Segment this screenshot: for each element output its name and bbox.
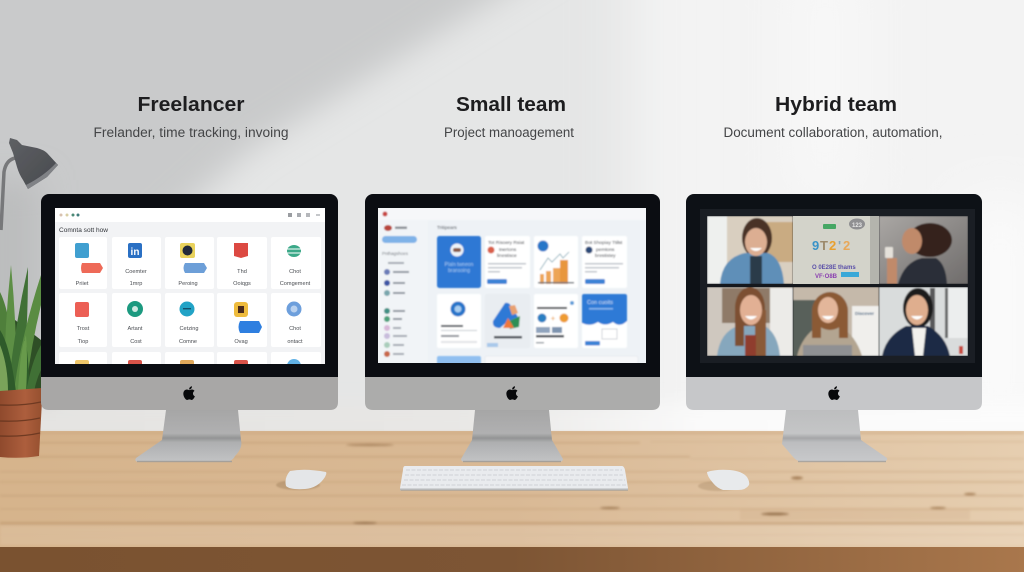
video tile: shared infographic slide: 9 [812,238,819,253]
card labels: Thd [237,269,247,275]
card labels: Chot [289,326,301,332]
icon: apple logo [506,386,518,400]
card labels: Comne [179,339,197,345]
video tile: woman at laptop [793,287,879,356]
video tile: shared infographic slide: 2 [843,238,850,253]
monitor stand [782,410,887,462]
plant leaves [0,265,41,392]
heading: Freelancer: Freelancer [138,94,245,116]
keyboard [400,466,628,491]
video tile: shared infographic slide: VF·O8B [815,274,838,280]
card labels: Ooiqgs [233,281,251,287]
subheading: Hybrid team: Document collaboration, automation, [724,125,942,140]
card labels: Trost [77,326,90,332]
app cards [59,237,321,366]
video tile: shared infographic slide: ' [838,238,841,253]
video tile: woman at laptop: Discover [855,311,874,316]
monitor body [365,194,660,410]
subheading: Small team: Project manoagement [444,125,574,140]
wall background [0,0,1024,431]
white text card two: pemtons [596,247,615,253]
blue project card: Plaln twneon [445,262,474,268]
monitor body [686,194,982,410]
sidebar [382,210,418,358]
card labels: ontact [287,339,303,345]
icon: apple logo [183,386,195,400]
screen: app grid [55,208,325,373]
white text card two: Bot Shopiay Ttilst [585,240,623,246]
workflow card: + [551,314,556,323]
video tile: shared infographic slide: 2 [829,238,836,253]
app icons [75,243,302,373]
content heading: Tritipears [437,225,457,231]
heading: Small team: Small team [456,94,566,116]
card labels: Tiop [78,339,88,345]
card labels [76,269,311,345]
workflow card [534,294,578,348]
screen title: Comnta sott how [59,227,109,234]
window toolbar [55,208,325,222]
desk front edge [0,547,1024,572]
monitor stand [135,410,241,462]
desk [0,431,1024,549]
screen: video call grid [707,216,968,356]
icon: apple logo [828,386,840,400]
card labels: Chot [289,269,301,275]
monitor: Small team [365,194,660,462]
video tile: woman in denim shirt [707,216,793,284]
white text card one: Tot Risoery Rsiat [488,240,525,246]
video tile: shared infographic slide [793,216,879,284]
logo card [486,302,523,348]
card labels: Comgement [280,281,311,287]
video tile: shared infographic slide: T [820,238,828,253]
profile card [437,294,481,348]
white text card one [485,236,530,288]
card labels: Priiet [76,281,89,287]
video tile: smiling woman in cardigan [707,287,793,356]
chart card [534,236,578,288]
video tile: shared infographic slide: O 0E28E thams [812,265,856,271]
monitor: Hybrid team [686,194,982,462]
video tile: shared infographic slide: 123 [852,223,863,229]
monitor body [41,194,338,410]
screen: project dashboard [378,208,646,366]
partial bottom cards [436,355,482,363]
video tile: woman in navy blazer [879,287,968,356]
card labels: Artant [128,326,143,332]
card labels: Ovag [234,339,248,345]
terracotta pot [0,388,42,458]
icon: desk lamp [1,138,58,230]
card labels: 1mrp [130,281,142,287]
card labels: Coemter [125,269,147,275]
heading: Hybrid team: Hybrid team [775,94,897,116]
monitor stand [461,410,563,462]
video tile: woman with phone [879,216,968,284]
app icons: in [131,247,139,258]
blue header card: Con cuoits [587,300,613,306]
white text card one: linestisce [497,253,517,259]
blue project card [437,236,481,288]
sidebar: Pnthagshoes [382,251,409,256]
card labels: Cost [130,339,142,345]
blue project card: bransoing [448,268,470,274]
white text card two: brestistey [595,253,616,259]
subheading: Freelancer: Frelander, time tracking, invoing [94,125,288,140]
mouse: right [698,470,749,491]
tag labels [81,263,262,333]
white text card one: tnertons [499,247,517,253]
monitor: Freelancer [41,194,338,462]
card labels: Cetzing [180,326,198,332]
mouse: left [276,470,326,490]
card labels: Peroing [178,281,198,287]
icon: potted plant [0,265,42,458]
white text card two [582,236,627,288]
blue header card [582,294,627,348]
